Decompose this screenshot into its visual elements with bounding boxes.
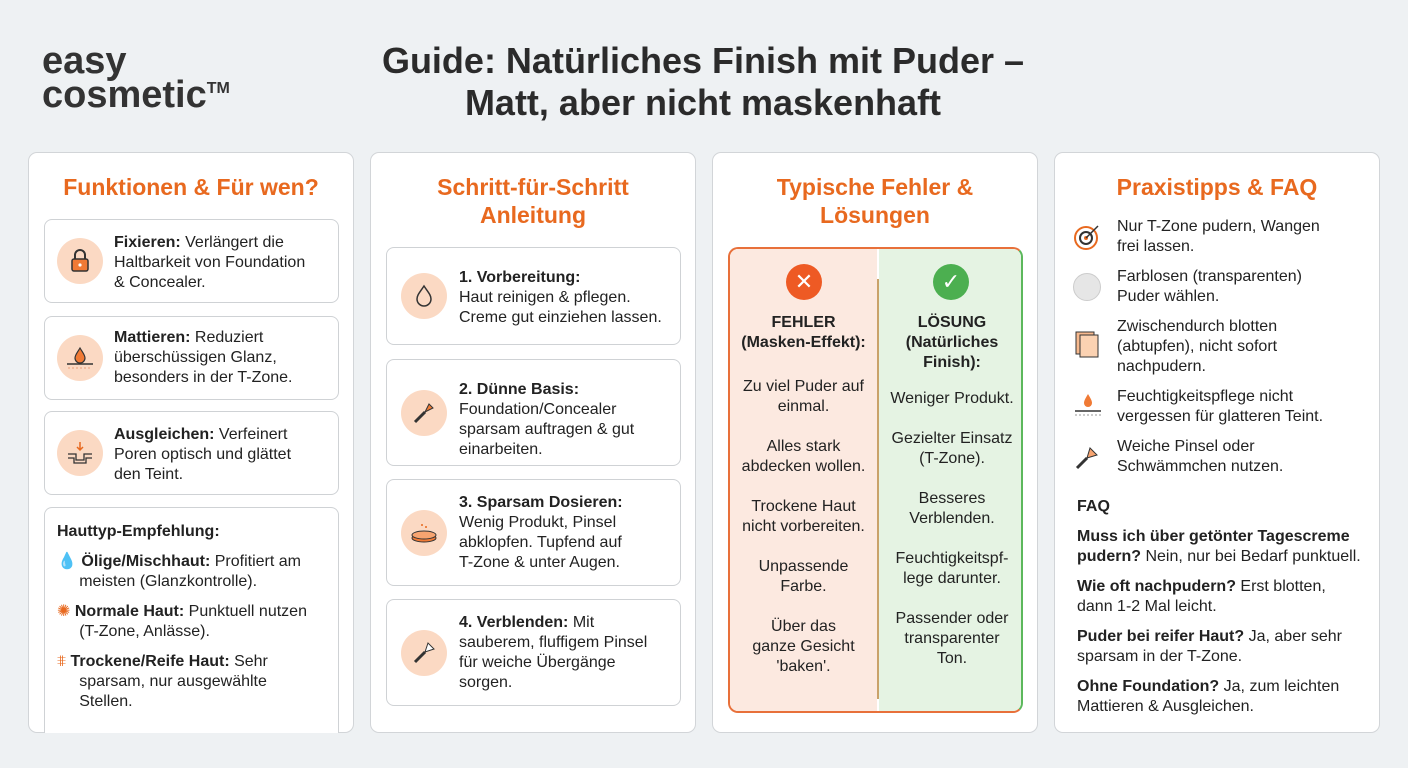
card: Ausgleichen: Ausgleichen: Verfeinert [114,426,287,443]
card: Fixieren [44,219,339,303]
card: Fixieren: Haltbarkeit von Foundation [114,254,305,271]
heading: Anleitung [480,202,586,228]
card: Hauttyp [44,507,339,733]
column: Lösung: Weniger Produkt. [890,390,1014,407]
FAQ [1077,498,1361,715]
card: Mattieren [44,316,339,400]
panel: Praxistipps: Weiche Pinsel oder [1117,438,1255,455]
panel: Praxistipps: Schwämmchen nutzen. [1117,458,1283,475]
column: Fehler: FEHLER [772,314,836,331]
column: Lösung: LÖSUNG [918,314,986,331]
step 3: Wenig Produkt, Pinsel [459,514,616,531]
panel: Schritte [370,152,696,733]
item: ölige: 💧 Ölige/Mischhaut: Profitiert am [57,553,301,570]
column: Lösung: (Natürliches [906,334,998,351]
heading: Typische Fehler & [777,174,973,200]
column: Lösung: Ton. [937,650,967,667]
card: Mattieren: überschüssigen Glanz, [114,349,277,366]
step 4 [386,599,681,706]
step 3: T-Zone & unter Augen. [459,554,620,571]
icon: powder [401,510,447,556]
item: ölige [57,552,301,590]
heading: Funktionen & Für wen? [63,174,319,200]
title: Guide: Natürliches Finish mit Puder – [382,40,1024,81]
column: Lösung: Besseres [919,490,985,507]
step 3 [386,479,681,586]
panel: Praxistipps: Feuchtigkeitspflege nicht [1117,388,1293,405]
column: Fehler: Über das [771,618,836,635]
column: Fehler: ganze Gesicht [752,638,855,655]
logo: cosmeticTM [42,74,230,116]
item: trockene: ⩨ Trockene/Reife Haut: Sehr [57,653,268,670]
step 1 [386,247,681,345]
icon: x [786,264,822,300]
FAQ: Wie oft nachpudern? Erst blotten, [1077,578,1326,595]
step 2: sparsam auftragen & gut [459,421,634,438]
heading [777,174,973,228]
tip 5 [1076,438,1283,475]
panel: Praxistipps: frei lassen. [1117,238,1194,255]
column: Fehler: Farbe. [780,578,827,595]
title [382,40,1024,123]
icon: powder [1073,273,1101,301]
column: Fehler: Alles stark [767,438,840,455]
step 1: Creme gut einziehen lassen. [459,309,662,326]
icon: brush [1076,447,1098,469]
panel: Praxistipps: Nur T-Zone pudern, Wangen [1117,218,1320,235]
heading: Schritt-für-Schritt [437,174,629,200]
step 3: abklopfen. Tupfend auf [459,534,622,551]
icon: brush [401,390,447,436]
panel: Funktionen [28,152,354,733]
card: Ausgleichen [44,411,339,495]
column: Fehler: 'baken'. [776,658,831,675]
logo: easy [42,40,127,82]
icon: x: ✕ [795,269,813,294]
panel: Praxistipps: Puder wählen. [1117,288,1219,305]
panel: Praxistipps: (abtupfen), nicht sofort [1117,338,1277,355]
item: trockene [57,653,268,710]
item: normale: (T-Zone, Anlässe). [79,623,210,640]
step 4: sauberem, fluffigem Pinsel [459,634,647,651]
step 2: 2. Dünne Basis: [459,381,579,398]
item: normale [57,603,307,640]
step 1: Haut reinigen & pflegen. [459,289,631,306]
icon: target [1074,226,1098,250]
step 4: 4. Verblenden: Mit [459,614,594,631]
card: Mattieren: besonders in der T-Zone. [114,369,292,386]
icon: lock [57,238,103,284]
column: Fehler: einmal. [778,398,829,415]
heading: Lösungen [820,202,930,228]
icon: brush [401,630,447,676]
icon: check [933,264,969,300]
column: Fehler: abdecken wollen. [742,458,865,475]
title: Matt, aber nicht maskenhaft [465,82,941,123]
column: Fehler: nicht vorbereiten. [742,518,865,535]
comparison box [728,247,1023,713]
column: Fehler [730,249,877,711]
step 2: Foundation/Concealer [459,401,616,418]
panel: Praxistipps: vergessen für glatteren Teint. [1117,408,1323,425]
icon: paper [1076,332,1098,358]
card: Ausgleichen: Poren optisch und glättet [114,446,291,463]
card: Ausgleichen: den Teint. [114,466,183,483]
column: Lösung: lege darunter. [903,570,1001,587]
icon: drop [57,335,103,381]
heading: Praxistipps & FAQ [1117,174,1317,200]
card: Fixieren: & Concealer. [114,274,206,291]
column: Fehler: Trockene Haut [751,498,856,515]
FAQ: Muss ich über getönter Tagescreme pudern? Nein, nur bei Bedarf punktuell. [1077,528,1361,565]
step 4: sorgen. [459,674,512,691]
step 2 [386,359,681,466]
card: Fixieren: Fixieren: Verlängert die [114,234,284,251]
FAQ: Puder bei reifer Haut? Ja, aber sehr sparsam in der T-Zone. [1077,628,1342,665]
logo [42,40,230,116]
panel: Praxistipps [1054,152,1380,733]
icon: drop [401,273,447,319]
card: Hauttyp: Hauttyp-Empfehlung: [57,523,220,540]
column: Lösung [879,249,1025,711]
item: trockene: Stellen. [79,693,133,710]
column: Lösung: Gezielter Einsatz [892,430,1012,447]
card: Mattieren: Mattieren: Reduziert [114,329,263,346]
panel: Praxistipps: nachpudern. [1117,358,1206,375]
step 4: für weiche Übergänge [459,654,616,671]
icon: check: ✓ [942,269,960,294]
tip 3 [1076,318,1277,375]
column: Lösung: (T-Zone). [919,450,985,467]
panel: Fehler [712,152,1038,733]
column: Fehler: Zu viel Puder auf [743,378,864,395]
panel: Praxistipps: Zwischendurch blotten [1117,318,1277,335]
column: Lösung: Passender oder [896,610,1008,627]
item: normale: ✺ Normale Haut: Punktuell nutzen [57,603,307,620]
icon: pores [57,430,103,476]
item: trockene: sparsam, nur ausgewählte [79,673,267,690]
FAQ: Ohne Foundation? Ja, zum leichten Mattieren & Ausgleichen. [1077,678,1339,715]
heading [437,174,629,228]
tip 1 [1074,218,1320,255]
icon: drop skin [1075,394,1101,416]
FAQ: dann 1-2 Mal leicht. [1077,598,1217,615]
item: ölige: meisten (Glanzkontrolle). [79,573,257,590]
column: Fehler: (Masken-Effekt): [741,334,866,351]
column: Lösung: Verblenden. [909,510,995,527]
column: Lösung: transparenter [904,630,1000,647]
tip 4 [1075,388,1323,425]
column: Lösung: Finish): [923,354,981,371]
tip 2 [1073,268,1302,305]
step 3: 3. Sparsam Dosieren: [459,494,623,511]
panel: Praxistipps: Farblosen (transparenten) [1117,268,1302,285]
step 1: 1. Vorbereitung: [459,269,580,286]
FAQ: FAQ [1077,498,1110,515]
column: Lösung: Feuchtigkeitspf- [896,550,1008,567]
column: Fehler: Unpassende [759,558,848,575]
step 2: einarbeiten. [459,441,543,458]
